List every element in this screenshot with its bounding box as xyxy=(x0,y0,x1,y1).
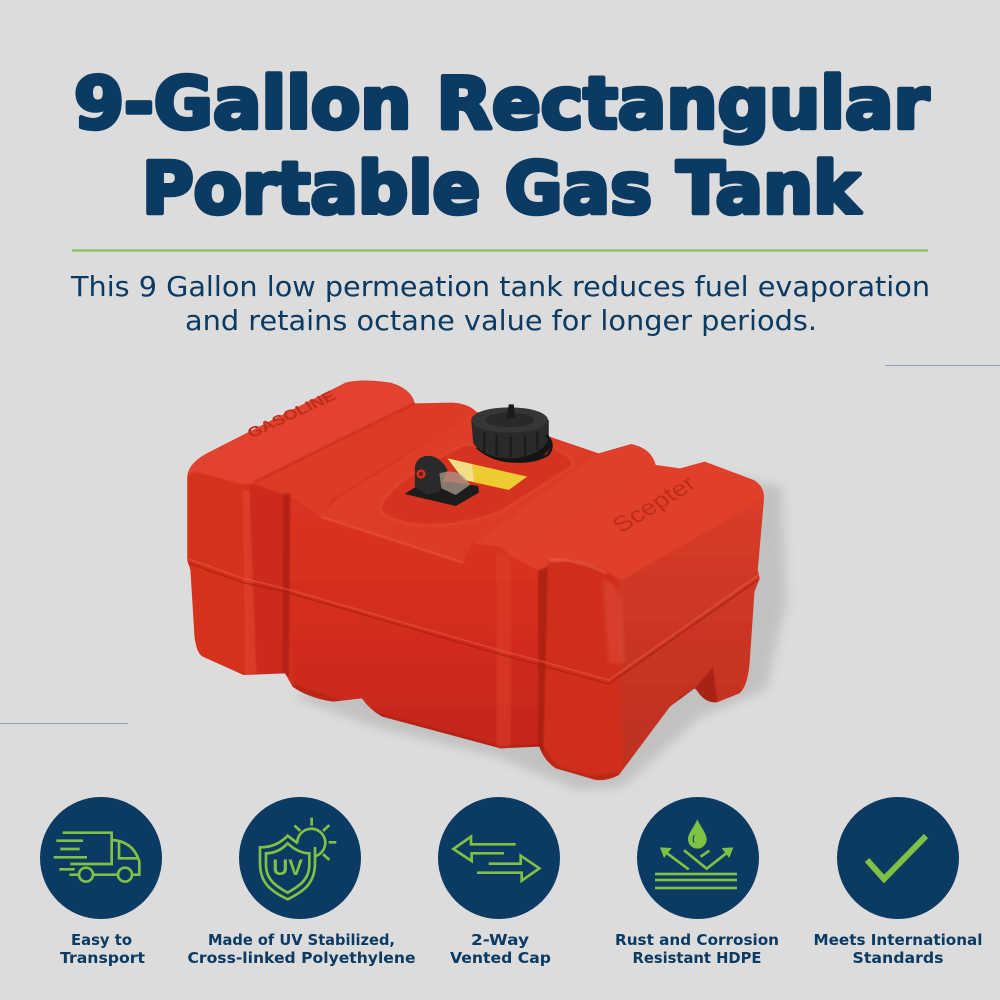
fuel port fitting xyxy=(405,456,479,506)
label: Rust and Corrosion xyxy=(615,931,779,949)
tank body xyxy=(187,380,764,780)
title: 9-Gallon Rectangular xyxy=(74,62,929,145)
title xyxy=(74,62,929,230)
product image: red fuel tank xyxy=(170,370,810,790)
icon: UV shield: UV xyxy=(272,855,303,880)
feature: 2-way vented cap xyxy=(438,797,560,967)
bottom shade xyxy=(292,687,619,778)
icon: water repelling layer xyxy=(637,797,759,919)
subtitle: This 9 Gallon low permeation tank reduces fuel evaporation xyxy=(70,271,930,303)
label: Vented Cap xyxy=(450,949,551,967)
embossed text: Scepter xyxy=(607,471,702,538)
top of left ridge xyxy=(187,380,415,485)
label: Made of UV Stabilized, xyxy=(208,931,395,949)
subtitle xyxy=(70,271,930,337)
right top panel xyxy=(509,462,764,583)
label: Resistant HDPE xyxy=(632,949,762,967)
right ridge xyxy=(474,444,656,557)
vented cap xyxy=(471,404,552,463)
right end face xyxy=(619,498,764,775)
title: Portable Gas Tank xyxy=(142,147,862,230)
label: Transport xyxy=(60,949,146,967)
warning label xyxy=(448,458,527,490)
subtitle: and retains octane value for longer periods. xyxy=(185,305,817,337)
icon: UV shield xyxy=(239,797,361,919)
icon: truck xyxy=(40,797,162,919)
feature: easy to transport xyxy=(40,797,162,967)
filler recess xyxy=(380,445,573,525)
front corner block xyxy=(558,560,623,773)
label: 2-Way xyxy=(471,931,529,949)
icon: check mark xyxy=(837,797,959,919)
label: Meets International xyxy=(814,931,982,949)
label: Standards xyxy=(852,949,944,967)
main top face xyxy=(321,412,599,562)
label: Cross-linked Polyethylene xyxy=(188,949,416,967)
tank shadow xyxy=(292,470,786,790)
seam lines xyxy=(187,563,758,684)
second ridge xyxy=(252,402,476,517)
feature: meets international standards xyxy=(814,797,982,967)
embossed text xyxy=(245,388,702,538)
embossed text: GASOLINE xyxy=(245,388,339,441)
label: Easy to xyxy=(71,931,132,949)
feature: rust and corrosion resistant xyxy=(615,797,779,967)
front face xyxy=(368,544,538,748)
icon: opposing arrows xyxy=(438,797,560,919)
left end face xyxy=(182,470,292,680)
feature: UV stabilized xyxy=(188,797,416,967)
